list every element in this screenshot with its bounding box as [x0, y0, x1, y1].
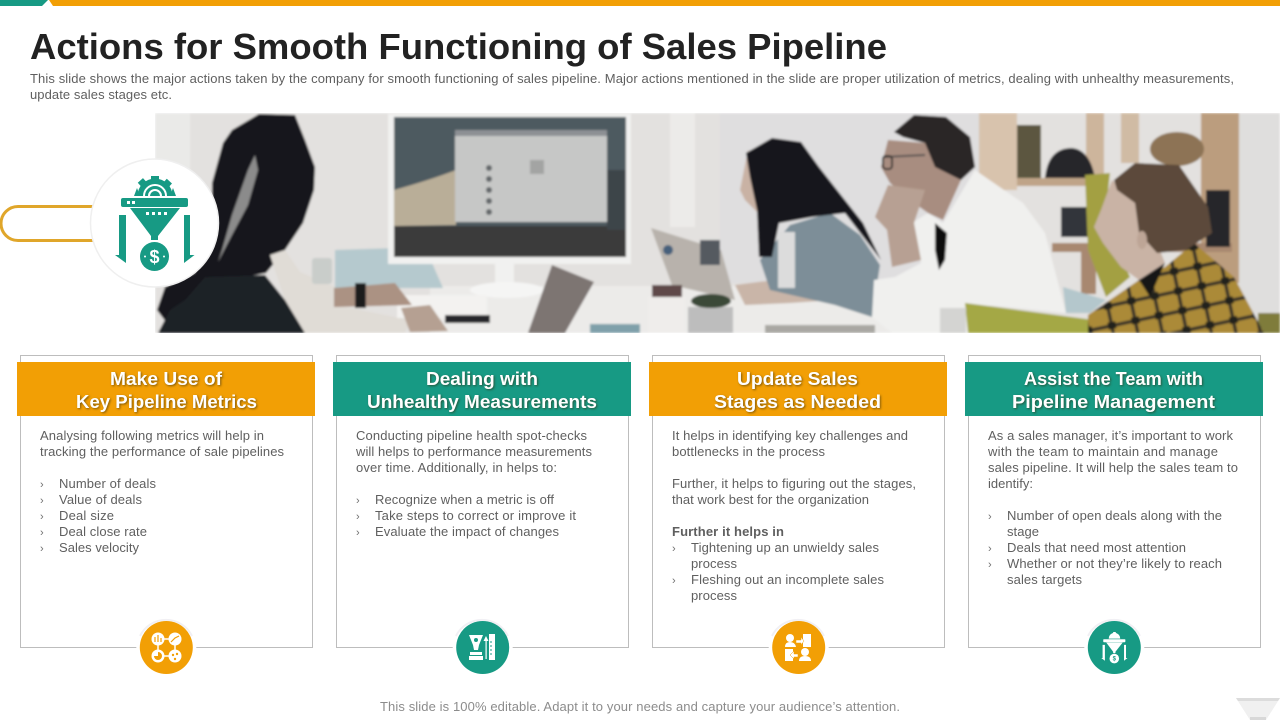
title: Actions for Smooth Functioning of Sales Pipeline	[30, 26, 887, 67]
body text: stages: process	[691, 556, 738, 571]
body text: team: ›	[988, 543, 992, 555]
body text: measurements: Conducting pipeline health spot-checks	[356, 428, 588, 443]
body text: stages: Fleshing out an incomplete sales	[691, 572, 884, 587]
table	[431, 287, 888, 332]
body text: metrics: Analysing following metrics will help in	[40, 428, 264, 443]
body text: metrics: tracking the performance of sale pipelines	[40, 444, 284, 459]
shelves	[979, 113, 1017, 190]
body text: team: Whether or not they’re likely to reach	[1007, 556, 1222, 571]
body text: stages: Further it helps in	[672, 524, 784, 539]
panel: dealing with unhealthy measurements	[333, 356, 631, 648]
body text: team: sales pipeline. It will help the sales team to	[988, 460, 1238, 475]
body text: team: As a sales manager, it’s important to work	[988, 428, 1234, 443]
body text: stages: that work best for the organization	[672, 492, 869, 507]
body text: metrics: Number of deals	[59, 476, 156, 491]
heading: assist the team with pipeline management: Assist the Team with	[1024, 369, 1203, 389]
body text: measurements: Recognize when a metric is off	[375, 492, 554, 507]
body text: team: Number of open deals along with the	[1007, 508, 1222, 523]
body text: measurements: will helps to performance measurements	[355, 444, 592, 459]
body text: measurements: ›	[356, 527, 360, 539]
body text: stages: ›	[672, 575, 676, 587]
body text: team: identify:	[988, 476, 1033, 491]
body text: measurements	[355, 428, 592, 539]
body text: team: ›	[988, 559, 992, 571]
monitor stand	[495, 264, 514, 282]
body text: stages: Further, it helps to figuring out the stages,	[672, 476, 916, 491]
icon: small sales funnel: $	[1113, 657, 1117, 663]
body text: team: sales targets	[1007, 572, 1082, 587]
body text: team: Deals that need most attention	[1007, 540, 1186, 555]
heading: dealing with unhealthy measurements	[333, 362, 631, 416]
body text: metrics: Sales velocity	[59, 540, 140, 555]
panel: update sales stages as needed	[649, 356, 947, 648]
body text: stages: process	[691, 588, 738, 603]
man	[870, 171, 1065, 316]
body text: stages: It helps in identifying key challenges and	[672, 428, 908, 443]
panel: make use of key pipeline metrics	[17, 356, 315, 648]
main circular icon: sales funnel: $	[149, 247, 160, 267]
heading: dealing with unhealthy measurements: Unhealthy Measurements	[367, 392, 597, 412]
subtitle text block	[30, 71, 1234, 102]
icon: people exchanging	[769, 618, 829, 678]
body text: stages	[672, 428, 916, 603]
body text: measurements: Evaluate the impact of changes	[375, 524, 560, 539]
body text: metrics	[40, 428, 284, 555]
chairs	[1085, 173, 1130, 297]
corner tab	[1236, 698, 1280, 720]
heading: assist the team with pipeline management: Pipeline Management	[1012, 392, 1215, 412]
top accent bar	[0, 0, 1280, 6]
main circular icon: sales funnel	[90, 159, 218, 287]
subtitle text block: update sales stages etc.	[30, 87, 172, 102]
body text: stages: Tightening up an unwieldy sales	[691, 540, 880, 555]
laptops and desk items	[528, 265, 594, 333]
heading: update sales stages as needed: Update Sales	[737, 369, 858, 389]
body text: team: stage	[1007, 524, 1039, 539]
heading: update sales stages as needed: Stages as Needed	[714, 392, 881, 412]
body text: team: with the team to maintain and manage	[987, 444, 1218, 459]
footer note: This slide is 100% editable. Adapt it to your needs and capture your audience’s attention.	[380, 699, 900, 714]
body text: measurements: over time. Additionally, in helps to:	[356, 460, 557, 475]
body text: metrics: ›	[40, 527, 44, 539]
heading: assist the team with pipeline management	[965, 362, 1263, 416]
body text: metrics: ›	[40, 511, 44, 523]
photo: team meeting looking at a monitor	[155, 113, 1280, 333]
body text: metrics: ›	[40, 479, 44, 491]
body text: measurements: ›	[356, 511, 360, 523]
body text: metrics: Deal close rate	[59, 524, 147, 539]
icon: metrics network	[136, 618, 196, 678]
heading: dealing with unhealthy measurements: Dealing with	[426, 369, 538, 389]
body text: team	[987, 428, 1238, 587]
monitor	[388, 114, 631, 264]
blue chair	[335, 247, 443, 288]
woman three	[1094, 180, 1165, 280]
woman one	[157, 114, 315, 330]
heading: make use of key pipeline metrics: Key Pipeline Metrics	[76, 392, 257, 412]
body text: stages: bottlenecks in the process	[672, 444, 826, 459]
body text: metrics: Deal size	[59, 508, 114, 523]
body text: team: ›	[988, 511, 992, 523]
heading: update sales stages as needed	[649, 362, 947, 416]
woman two	[734, 280, 817, 306]
body text: metrics: Value of deals	[59, 492, 142, 507]
body text: measurements: ›	[356, 495, 360, 507]
pill outline connector	[1, 206, 93, 240]
body text: measurements: Take steps to correct or improve it	[375, 508, 576, 523]
heading: make use of key pipeline metrics	[17, 362, 315, 416]
icon: measurement and ruler	[453, 618, 513, 678]
body text: metrics: ›	[40, 543, 44, 555]
heading: make use of key pipeline metrics: Make Use of	[110, 369, 223, 389]
icon: small sales funnel	[1084, 618, 1144, 678]
panel: assist the team with pipeline management	[965, 356, 1263, 648]
body text: stages: ›	[672, 543, 676, 555]
subtitle text block: This slide shows the major actions taken by the company for smooth functioning of sales pipeline. Major actions mentioned in the slide are proper utilization of metrics, dealing with unhealthy measurements,	[30, 71, 1234, 86]
body text: metrics: ›	[40, 495, 44, 507]
